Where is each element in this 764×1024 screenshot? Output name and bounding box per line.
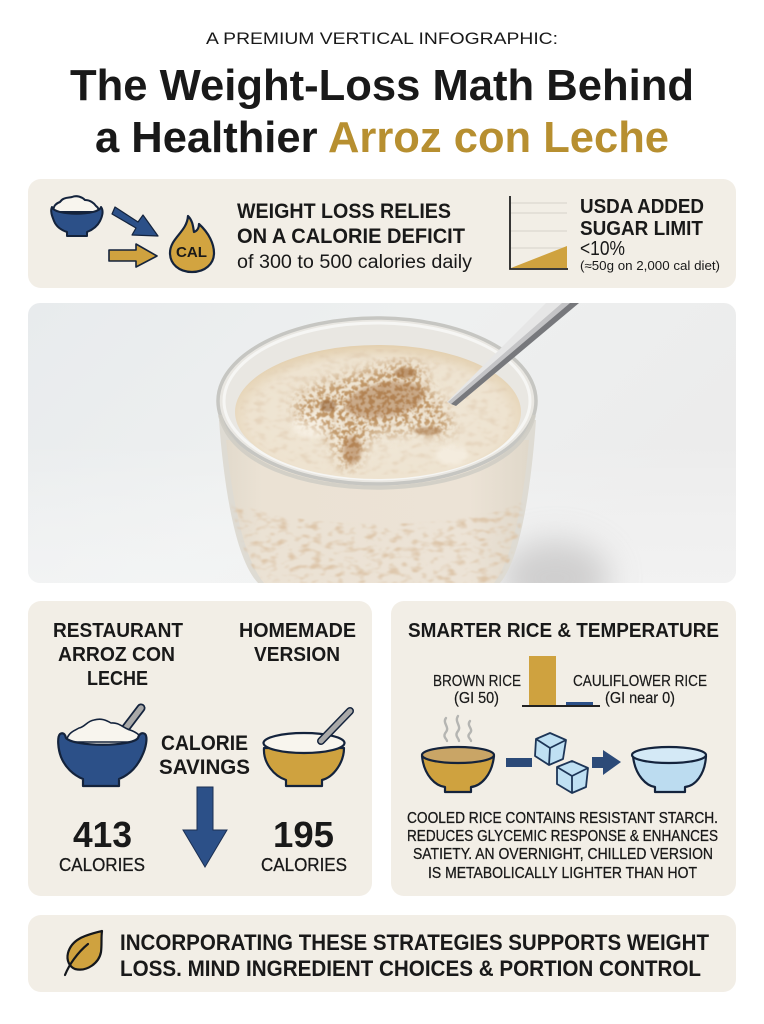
chart: added sugar limit bbox=[510, 196, 568, 269]
title: a Healthier Arroz con Leche bbox=[95, 113, 669, 162]
title: The Weight-Loss Math Behind bbox=[70, 61, 694, 110]
text: conclusion bbox=[120, 930, 710, 981]
text: USDA sugar limit: USDA ADDED bbox=[580, 196, 704, 218]
icon: chilled blue bowl bbox=[632, 747, 706, 792]
heading: restaurant: LECHE bbox=[87, 668, 148, 690]
label: cauliflower rice bbox=[573, 673, 707, 707]
glass rim bbox=[218, 318, 536, 484]
arrow: savings down bbox=[183, 787, 227, 867]
heading: homemade: HOMEMADE bbox=[239, 620, 356, 642]
text: calorie deficit: ON A CALORIE DEFICIT bbox=[237, 225, 465, 248]
title bbox=[70, 61, 694, 162]
icon: ice cubes bbox=[535, 733, 588, 793]
text: USDA sugar limit: <10% bbox=[580, 238, 625, 260]
text: resistant starch: COOLED RICE CONTAINS RESISTANT STARCH. bbox=[407, 810, 718, 827]
arrow: gold horizontal bbox=[109, 244, 157, 267]
rice surface bbox=[235, 345, 521, 479]
text: resistant starch: IS METABOLICALLY LIGHTER THAN HOT bbox=[428, 865, 697, 882]
label: cauliflower rice: (GI near 0) bbox=[605, 690, 675, 707]
heading: homemade: VERSION bbox=[254, 644, 340, 666]
label: brown rice bbox=[433, 673, 521, 707]
photo: arroz con leche in glass bowl bbox=[28, 303, 736, 583]
heading: homemade bbox=[239, 620, 356, 666]
text: calorie deficit: WEIGHT LOSS RELIES bbox=[237, 200, 451, 223]
label: calorie savings bbox=[159, 732, 250, 779]
heading: restaurant: RESTAURANT bbox=[53, 620, 183, 642]
arrow: to chilled bbox=[592, 750, 621, 775]
text: USDA sugar limit: (≈50g on 2,000 cal diet) bbox=[580, 259, 720, 273]
icon: navy dash bbox=[506, 758, 532, 767]
stat: 195 calories: 195 bbox=[273, 814, 334, 855]
panel: smarter rice and temperature bbox=[391, 601, 736, 896]
stat: 195 calories bbox=[261, 814, 347, 875]
cinnamon bbox=[294, 362, 452, 470]
icon: leaf bbox=[65, 931, 102, 975]
icon: warm gold bowl bbox=[422, 747, 494, 792]
icon: rice bowl bbox=[51, 196, 103, 236]
spoon bbox=[447, 303, 579, 406]
panel: restaurant vs homemade calories bbox=[28, 601, 372, 896]
bar chart: glycemic index bbox=[522, 656, 600, 707]
text: resistant starch: REDUCES GLYCEMIC RESPONSE & ENHANCES bbox=[407, 828, 718, 845]
label: calorie savings: SAVINGS bbox=[159, 756, 250, 779]
stat: 195 calories: CALORIES bbox=[261, 854, 347, 875]
glass body bbox=[219, 420, 536, 583]
text: resistant starch bbox=[407, 810, 718, 882]
heading: restaurant: ARROZ CON bbox=[58, 644, 175, 666]
text: calorie deficit bbox=[237, 200, 473, 273]
icon: calorie flame bbox=[170, 216, 214, 272]
text: resistant starch: SATIETY. AN OVERNIGHT, CHILLED VERSION bbox=[413, 846, 713, 863]
heading: restaurant bbox=[53, 620, 183, 690]
eyebrow text: A PREMIUM VERTICAL INFOGRAPHIC: bbox=[206, 29, 558, 48]
panel: conclusion bbox=[28, 915, 736, 992]
stat: 413 calories bbox=[59, 814, 145, 875]
front rim highlight bbox=[220, 415, 534, 488]
stat: 413 calories: 413 bbox=[73, 814, 132, 855]
label: cauliflower rice: CAULIFLOWER RICE bbox=[573, 673, 707, 690]
text: calorie deficit: of 300 to 500 calories daily bbox=[237, 252, 473, 273]
icon: gold bowl bbox=[264, 711, 350, 786]
text: conclusion: LOSS. MIND INGREDIENT CHOICES & PORTION CONTROL bbox=[120, 956, 701, 981]
label: brown rice: (GI 50) bbox=[454, 690, 499, 707]
label: calorie savings: CALORIE bbox=[161, 732, 248, 755]
arrow: blue diagonal bbox=[112, 207, 158, 236]
stat: 413 calories: CALORIES bbox=[59, 854, 145, 875]
label: brown rice: BROWN RICE bbox=[433, 673, 521, 690]
icon: calorie flame: CAL bbox=[176, 245, 207, 261]
text: USDA sugar limit bbox=[580, 196, 720, 273]
text: USDA sugar limit: SUGAR LIMIT bbox=[580, 218, 703, 240]
icon: blue bowl with rice bbox=[58, 708, 146, 786]
icon: steam bbox=[444, 716, 471, 741]
panel: calorie deficit and sugar limit bbox=[28, 179, 736, 288]
heading: SMARTER RICE & TEMPERATURE bbox=[408, 620, 719, 642]
text: conclusion: INCORPORATING THESE STRATEGIES SUPPORTS WEIGHT bbox=[120, 930, 710, 955]
